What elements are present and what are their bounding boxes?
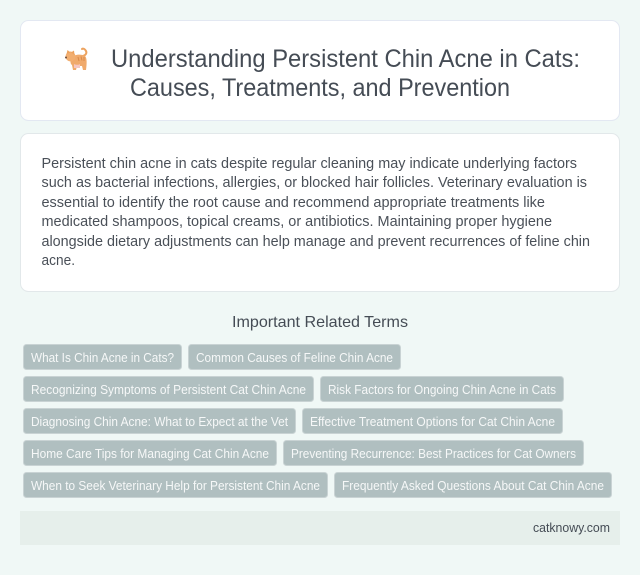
title panel — [20, 20, 620, 120]
chip: preventing recurrence — [284, 440, 584, 466]
chip: diagnosing: Diagnosing Chin Acne: What to Expect at the Vet — [31, 415, 288, 429]
summary text: alongside dietary adjustments can help manage and prevent recurrences of feline chin — [42, 233, 590, 250]
footer — [20, 511, 620, 545]
summary text — [42, 155, 590, 269]
panel: summary — [20, 134, 620, 292]
summary text: acne. — [42, 252, 75, 269]
summary text: essential to identify the root cause and recommend appropriate treatments like — [42, 194, 545, 211]
chip: common causes: Common Causes of Feline Chin Acne — [196, 351, 393, 365]
summary text: Persistent chin acne in cats despite regular cleaning may indicate underlying factors — [42, 155, 577, 172]
heading: important related terms: Important Related Terms — [232, 314, 408, 331]
icon: cat — [65, 49, 87, 70]
summary text: medicated shampoos, topical creams, or antibiotics. Maintaining proper hygiene — [42, 213, 552, 230]
chip: common causes — [188, 344, 400, 370]
related terms chips — [24, 344, 612, 498]
chip: preventing recurrence: Preventing Recurrence: Best Practices for Cat Owners — [291, 447, 576, 461]
chip: when to seek help: When to Seek Veterinary Help for Persistent Chin Acne — [31, 479, 320, 493]
chip: when to seek help — [24, 472, 328, 498]
chip: risk factors: Risk Factors for Ongoing Chin Acne in Cats — [328, 383, 556, 397]
title text — [111, 45, 580, 102]
summary text: such as bacterial infections, allergies, or blocked hair follicles. Veterinary evaluation is — [42, 174, 587, 191]
chip: treatment options — [302, 408, 562, 434]
chip: faq: Frequently Asked Questions About Cat Chin Acne — [342, 479, 604, 493]
footer text: catknowy.com — [533, 520, 610, 535]
chip: home care — [24, 440, 276, 466]
title text: Understanding Persistent Chin Acne in Cats: — [111, 45, 580, 73]
chip: treatment options: Effective Treatment Options for Cat Chin Acne — [310, 415, 555, 429]
chip: what is chin acne: What Is Chin Acne in Cats? — [31, 351, 174, 365]
chip: recognizing symptoms — [24, 376, 314, 402]
chip: diagnosing — [24, 408, 296, 434]
chip: faq — [334, 472, 612, 498]
chip: risk factors — [320, 376, 564, 402]
chip: home care: Home Care Tips for Managing Cat Chin Acne — [31, 447, 269, 461]
title text: Causes, Treatments, and Prevention — [130, 74, 510, 102]
chip: what is chin acne — [24, 344, 182, 370]
chip: recognizing symptoms: Recognizing Symptoms of Persistent Cat Chin Acne — [31, 383, 306, 397]
